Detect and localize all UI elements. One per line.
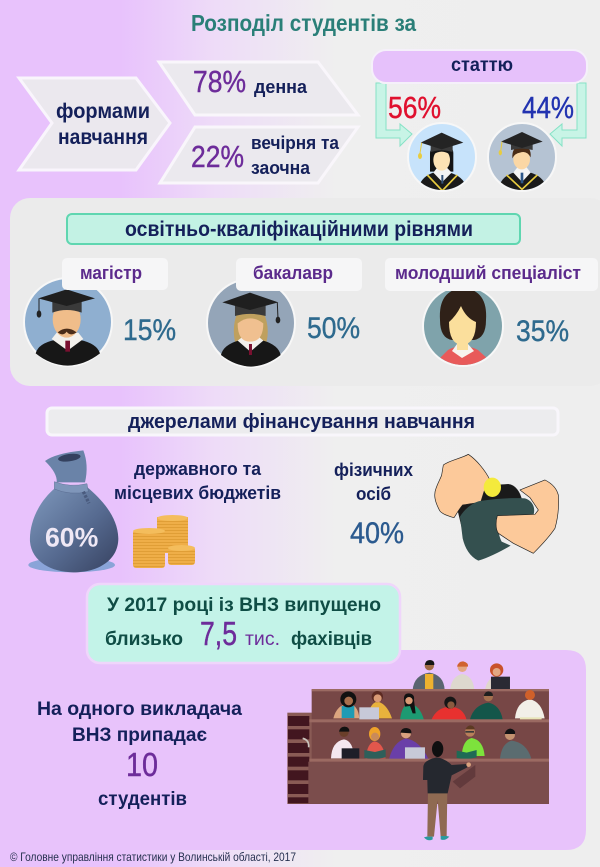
heading: gender	[372, 50, 587, 83]
chevron: forms of study: навчання	[58, 126, 148, 149]
label: master	[62, 258, 168, 290]
panel: qualification levels	[10, 198, 600, 386]
illustration: lecture hall	[287, 660, 549, 840]
callout: graduates: У 2017 році із ВНЗ випущено	[107, 595, 381, 616]
heading: funding sources: джерелами фінансування навчання	[128, 411, 475, 433]
icon: money bag	[28, 450, 118, 572]
chevron: evening and part-time: заочна	[251, 158, 311, 178]
callout: graduates	[87, 584, 400, 663]
text: individuals	[334, 460, 413, 504]
heading: funding sources	[47, 408, 558, 435]
footer source: © Головне управління статистики у Волинській області, 2017	[10, 850, 296, 864]
chevron: evening and part-time: вечірня та	[251, 133, 340, 153]
value: individuals: 40%	[350, 517, 404, 550]
label: junior specialist: молодший спеціаліст	[395, 263, 581, 283]
heading: qualification levels	[67, 214, 520, 244]
icon: bachelor graduate	[207, 279, 295, 367]
icon: coins	[133, 515, 195, 568]
arrow: to male	[550, 83, 586, 146]
callout: graduates: 7,5	[200, 615, 237, 652]
chevron: evening and part-time: 22%	[191, 139, 244, 174]
chevron: full-time: 78%	[193, 64, 246, 99]
icon: master graduate	[24, 278, 112, 366]
callout: graduates: фахівців	[291, 629, 372, 650]
text: individuals: фізичних	[334, 460, 413, 480]
label: junior specialist	[385, 258, 598, 291]
heading: qualification levels: освітньо-кваліфікаційними рівнями	[125, 218, 473, 241]
icon: money bag: 60%	[45, 522, 98, 552]
chevron: full-time	[159, 62, 358, 115]
panel: study forms	[19, 62, 358, 183]
callout: graduates: тис.	[245, 629, 280, 650]
value: female: 56%	[388, 90, 441, 125]
students: front row	[331, 725, 531, 759]
text: individuals: осіб	[356, 484, 391, 504]
label: bachelor: бакалавр	[253, 263, 333, 283]
text: ratio: На одного викладача	[37, 699, 242, 720]
text: ratio: ВНЗ припадає	[72, 725, 207, 746]
icon: junior specialist	[423, 286, 503, 370]
icon: female graduate	[408, 123, 476, 200]
panel: gender	[372, 50, 587, 200]
students: middle row	[333, 690, 545, 720]
text: budgets	[114, 459, 281, 503]
heading: gender: статтю	[451, 55, 513, 76]
students: top row	[413, 660, 510, 690]
text: budgets: державного та	[134, 459, 262, 479]
label: bachelor	[236, 258, 362, 291]
title: Розподіл студентів за	[191, 10, 416, 36]
text: budgets: місцевих бюджетів	[114, 483, 281, 503]
panel: funding sources	[28, 408, 559, 572]
callout: graduates: близько	[105, 629, 183, 650]
chevron: full-time: денна	[254, 77, 308, 97]
text: ratio: студентів	[98, 789, 187, 810]
label: master: магістр	[80, 263, 142, 283]
text: ratio	[37, 699, 242, 810]
arrow: to female	[376, 83, 412, 146]
value: junior specialist: 35%	[516, 315, 569, 348]
chevron: evening and part-time	[160, 127, 358, 183]
chevron: forms of study: формами	[56, 100, 150, 123]
icon: male graduate	[488, 123, 556, 200]
value: master: 15%	[123, 314, 176, 347]
value: bachelor: 50%	[307, 312, 360, 345]
chevron: forms of study	[19, 78, 170, 170]
icon: hands with wallet	[435, 454, 559, 561]
teacher	[423, 741, 475, 840]
text: ratio: 10	[126, 746, 158, 783]
value: male: 44%	[522, 90, 574, 125]
panel: lecture room	[0, 650, 586, 850]
